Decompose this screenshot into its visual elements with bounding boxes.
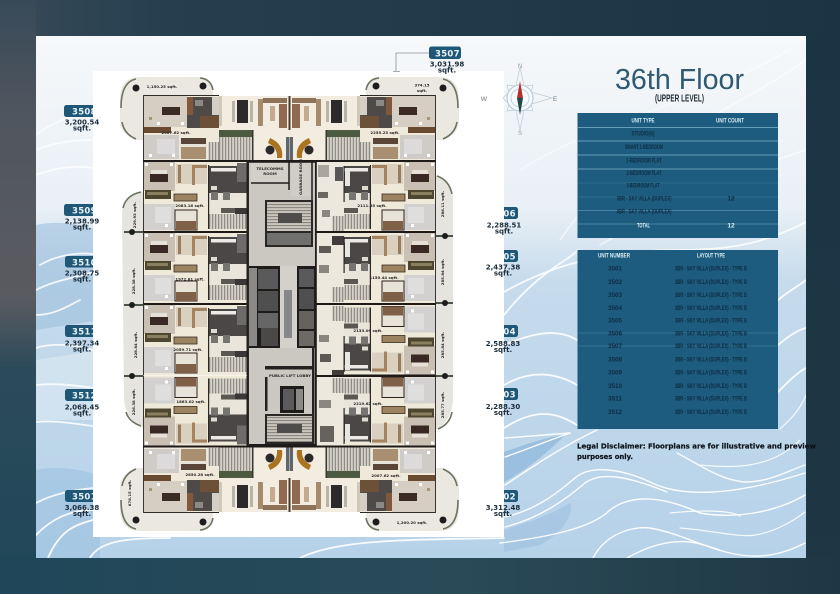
table: unit layouts: 3BR - SKY VILLA (DUPLEX) - TYPE B bbox=[675, 343, 747, 350]
table: unit layouts: UNIT NUMBER bbox=[598, 252, 630, 260]
table: unit layouts: 3BR - SKY VILLA (DUPLEX) - TYPE B bbox=[675, 330, 747, 338]
plan area labels: 286.11 sqft. bbox=[440, 190, 445, 217]
unit values: sqft. bbox=[73, 224, 91, 232]
central lobbies bbox=[218, 96, 361, 512]
unit values: sqft. bbox=[73, 124, 91, 132]
table: unit type count: SMART 1-BEDROOM bbox=[625, 144, 663, 151]
unit values: sqft. bbox=[495, 228, 513, 236]
floor plan sheet bbox=[93, 71, 504, 537]
unit values: sqft. bbox=[73, 410, 91, 418]
unit badges behind the plan sheet: 3510 bbox=[72, 258, 97, 268]
table: unit layouts: 3511 bbox=[608, 396, 622, 402]
table: unit layouts bbox=[578, 250, 778, 429]
unit badges behind the plan sheet: 3503 bbox=[491, 390, 516, 400]
table: unit type count bbox=[578, 113, 778, 238]
table: unit layouts: 3BR - SKY VILLA (DUPLEX) - TYPE B bbox=[675, 305, 747, 312]
unit badges behind the plan sheet: 3506 bbox=[491, 209, 516, 219]
unit badges behind the plan sheet: 3504 bbox=[491, 327, 516, 337]
unit values: 2,397.34 bbox=[65, 340, 99, 348]
table: unit type count: 12 bbox=[727, 196, 735, 202]
title: 36th Floor bbox=[615, 64, 744, 96]
legal disclaimer: Legal Disclaimer: Floorplans are for illustrative and preview bbox=[577, 442, 816, 450]
unit values: sqft. bbox=[494, 510, 512, 518]
corner units bbox=[143, 95, 436, 513]
table: unit type count: 3BR - SKY VILLA (DUPLEX) bbox=[616, 196, 672, 202]
table: unit type count: UNIT COUNT bbox=[716, 117, 744, 124]
plan area labels: 2083.16 sqft. bbox=[175, 203, 205, 208]
callout: unit 3507: 3507 bbox=[435, 49, 460, 59]
table: unit layouts: 3509 bbox=[608, 370, 622, 376]
unit values: 2,588.83 bbox=[486, 340, 520, 348]
icon: compass: N bbox=[518, 64, 522, 70]
side terraces bbox=[122, 175, 453, 430]
unit badges behind the plan sheet: 3511 bbox=[72, 327, 97, 337]
unit badges behind the plan sheet bbox=[64, 105, 518, 502]
unit badges behind the plan sheet: 3509 bbox=[72, 206, 97, 216]
unit badges behind the plan sheet: 3512 bbox=[72, 391, 97, 401]
right utility strip bbox=[315, 161, 350, 446]
plan area labels: 285.77 sqft. bbox=[440, 391, 445, 418]
table: unit layouts: 3BR - SKY VILLA (DUPLEX) - TYPE B bbox=[675, 409, 747, 416]
table: unit layouts: 3BR - SKY VILLA (DUPLEX) - TYPE B bbox=[675, 279, 747, 286]
table: unit layouts: 3508 bbox=[608, 356, 622, 364]
table: unit type count: 12 bbox=[727, 222, 735, 229]
unit values: sqft. bbox=[73, 276, 91, 284]
plan area labels: 1,200.20 sqft. bbox=[397, 520, 428, 525]
table: unit type count: 3-BEDROOM FLAT bbox=[626, 182, 660, 190]
table: unit layouts: LAYOUT TYPE bbox=[697, 252, 725, 260]
unit values: sqft. bbox=[73, 510, 91, 518]
callout: unit 3507: sqft. bbox=[438, 66, 456, 74]
core bbox=[247, 160, 317, 447]
plan area labels: 2255.23 sqft. bbox=[370, 130, 400, 135]
unit values: 2,437.38 bbox=[486, 264, 520, 272]
table: unit type count: 4BR - SKY VILLA (DUPLEX) bbox=[616, 208, 672, 216]
plan area labels: 1863.02 sqft. bbox=[176, 399, 206, 404]
plan area labels: 228.38 sqft. bbox=[131, 267, 136, 294]
table: unit layouts: 3BR - SKY VILLA (DUPLEX) - TYPE B bbox=[675, 370, 747, 376]
unit values: 3,200.54 bbox=[65, 118, 99, 126]
plan area labels bbox=[127, 82, 445, 525]
table: unit layouts: 3505 bbox=[608, 318, 622, 324]
icon: compass: W bbox=[481, 96, 488, 103]
callout: unit 3507 bbox=[393, 46, 464, 74]
plan area labels: 2111.65 sqft. bbox=[357, 203, 387, 208]
unit badges behind the plan sheet: 3508 bbox=[72, 107, 97, 117]
unit badges behind the plan sheet: 3505 bbox=[491, 252, 516, 262]
plan area labels: 285.84 sqft. bbox=[440, 258, 445, 285]
plan area labels: 2133.09 sqft. bbox=[353, 328, 383, 333]
table: unit layouts: 3BR - SKY VILLA (DUPLEX) - TYPE B bbox=[675, 383, 747, 390]
unit values: 2,288.51 bbox=[487, 222, 521, 230]
unit values: 3,312.48 bbox=[486, 504, 520, 512]
table: unit layouts: 3501 bbox=[608, 266, 622, 272]
plan area labels: 1972.81 sqft. bbox=[175, 276, 205, 282]
icon: compass: S bbox=[518, 131, 522, 137]
plan area labels: 374.15 bbox=[414, 82, 430, 88]
table: unit layouts: 3504 bbox=[608, 305, 622, 312]
icon: compass: E bbox=[553, 97, 557, 103]
unit values: 3,066.38 bbox=[65, 504, 99, 512]
plan area labels: 1150.44 sqft. bbox=[369, 275, 399, 280]
plan area labels: 285.84 sqft. bbox=[440, 331, 445, 358]
plan area labels: 1,150.25 sqft. bbox=[147, 84, 178, 89]
callout: unit 3507: 3,031.98 bbox=[430, 60, 464, 68]
table: unit layouts: 3503 bbox=[608, 292, 622, 299]
table: unit layouts: 3BR - SKY VILLA (DUPLEX) - TYPE B bbox=[675, 266, 747, 272]
plan area labels: 2059.71 sqft. bbox=[173, 347, 203, 352]
table: unit layouts: 3512 bbox=[608, 409, 622, 416]
plan area labels: PUBLIC LIFT LOBBY bbox=[269, 373, 311, 378]
subtitle: (UPPER LEVEL) bbox=[655, 94, 704, 104]
unit badges behind the plan sheet: 3502 bbox=[491, 492, 516, 502]
plan area labels: 229.93 sqft. bbox=[132, 201, 137, 228]
corner terraces bbox=[120, 77, 459, 531]
plan walls bbox=[143, 161, 436, 446]
legal disclaimer bbox=[577, 442, 816, 461]
plan area labels: GARBAGE ROOM bbox=[298, 159, 303, 195]
table: unit type count: 2-BEDROOM FLAT bbox=[626, 170, 662, 177]
table: unit type count: UNIT TYPE bbox=[632, 117, 655, 124]
plan area labels: 2007.62 sqft. bbox=[161, 130, 191, 135]
table: unit type count: STUDIO(S) bbox=[632, 130, 654, 138]
apartment rows left bbox=[143, 160, 248, 448]
plan area labels: 228.84 sqft. bbox=[133, 331, 138, 358]
unit values: sqft. bbox=[494, 270, 512, 278]
plan area labels: sqft. bbox=[417, 88, 428, 93]
unit values: 2,138.99 bbox=[65, 218, 99, 226]
table: unit layouts: 3BR - SKY VILLA (DUPLEX) - TYPE B bbox=[675, 396, 747, 402]
unit values: sqft. bbox=[494, 346, 512, 354]
table: unit type count: TOTAL bbox=[637, 222, 650, 229]
table: unit layouts: 3510 bbox=[608, 383, 622, 390]
table: unit type count: 1-BEDROOM FLAT bbox=[626, 157, 662, 164]
icon: compass bbox=[481, 64, 557, 137]
plan area labels: 2850.28 sqft. bbox=[185, 472, 215, 477]
unit values: 2,288.30 bbox=[486, 403, 520, 411]
legal disclaimer: purposes only. bbox=[577, 453, 633, 461]
plan area labels: TELECOMMS bbox=[256, 166, 284, 171]
unit values: sqft. bbox=[494, 409, 512, 417]
unit values: 2,068.45 bbox=[65, 404, 99, 412]
apartment rows right bbox=[331, 160, 436, 448]
table: unit layouts: 3BR - SKY VILLA (DUPLEX) - TYPE B bbox=[675, 292, 747, 299]
plan area labels: 676.15 sqft. bbox=[127, 479, 132, 506]
table: unit layouts: 3BR - SKY VILLA (DUPLEX) - TYPE B bbox=[675, 318, 747, 324]
plan area labels: 2007.62 sqft. bbox=[371, 473, 401, 478]
table: unit layouts: 3506 bbox=[608, 330, 622, 338]
plan area labels: 226.38 sqft. bbox=[131, 388, 136, 415]
table: unit layouts: 3502 bbox=[608, 279, 622, 286]
unit values bbox=[65, 118, 521, 518]
unit values: 2,308.75 bbox=[65, 270, 99, 278]
table: unit layouts: 3BR - SKY VILLA (DUPLEX) - TYPE B bbox=[675, 356, 747, 364]
plan area labels: 2219.62 sqft. bbox=[353, 401, 383, 406]
unit values: sqft. bbox=[73, 346, 91, 354]
unit badges behind the plan sheet: 3501 bbox=[72, 492, 97, 502]
plan area labels: ROOM bbox=[263, 171, 277, 176]
table: unit layouts: 3507 bbox=[608, 343, 622, 350]
